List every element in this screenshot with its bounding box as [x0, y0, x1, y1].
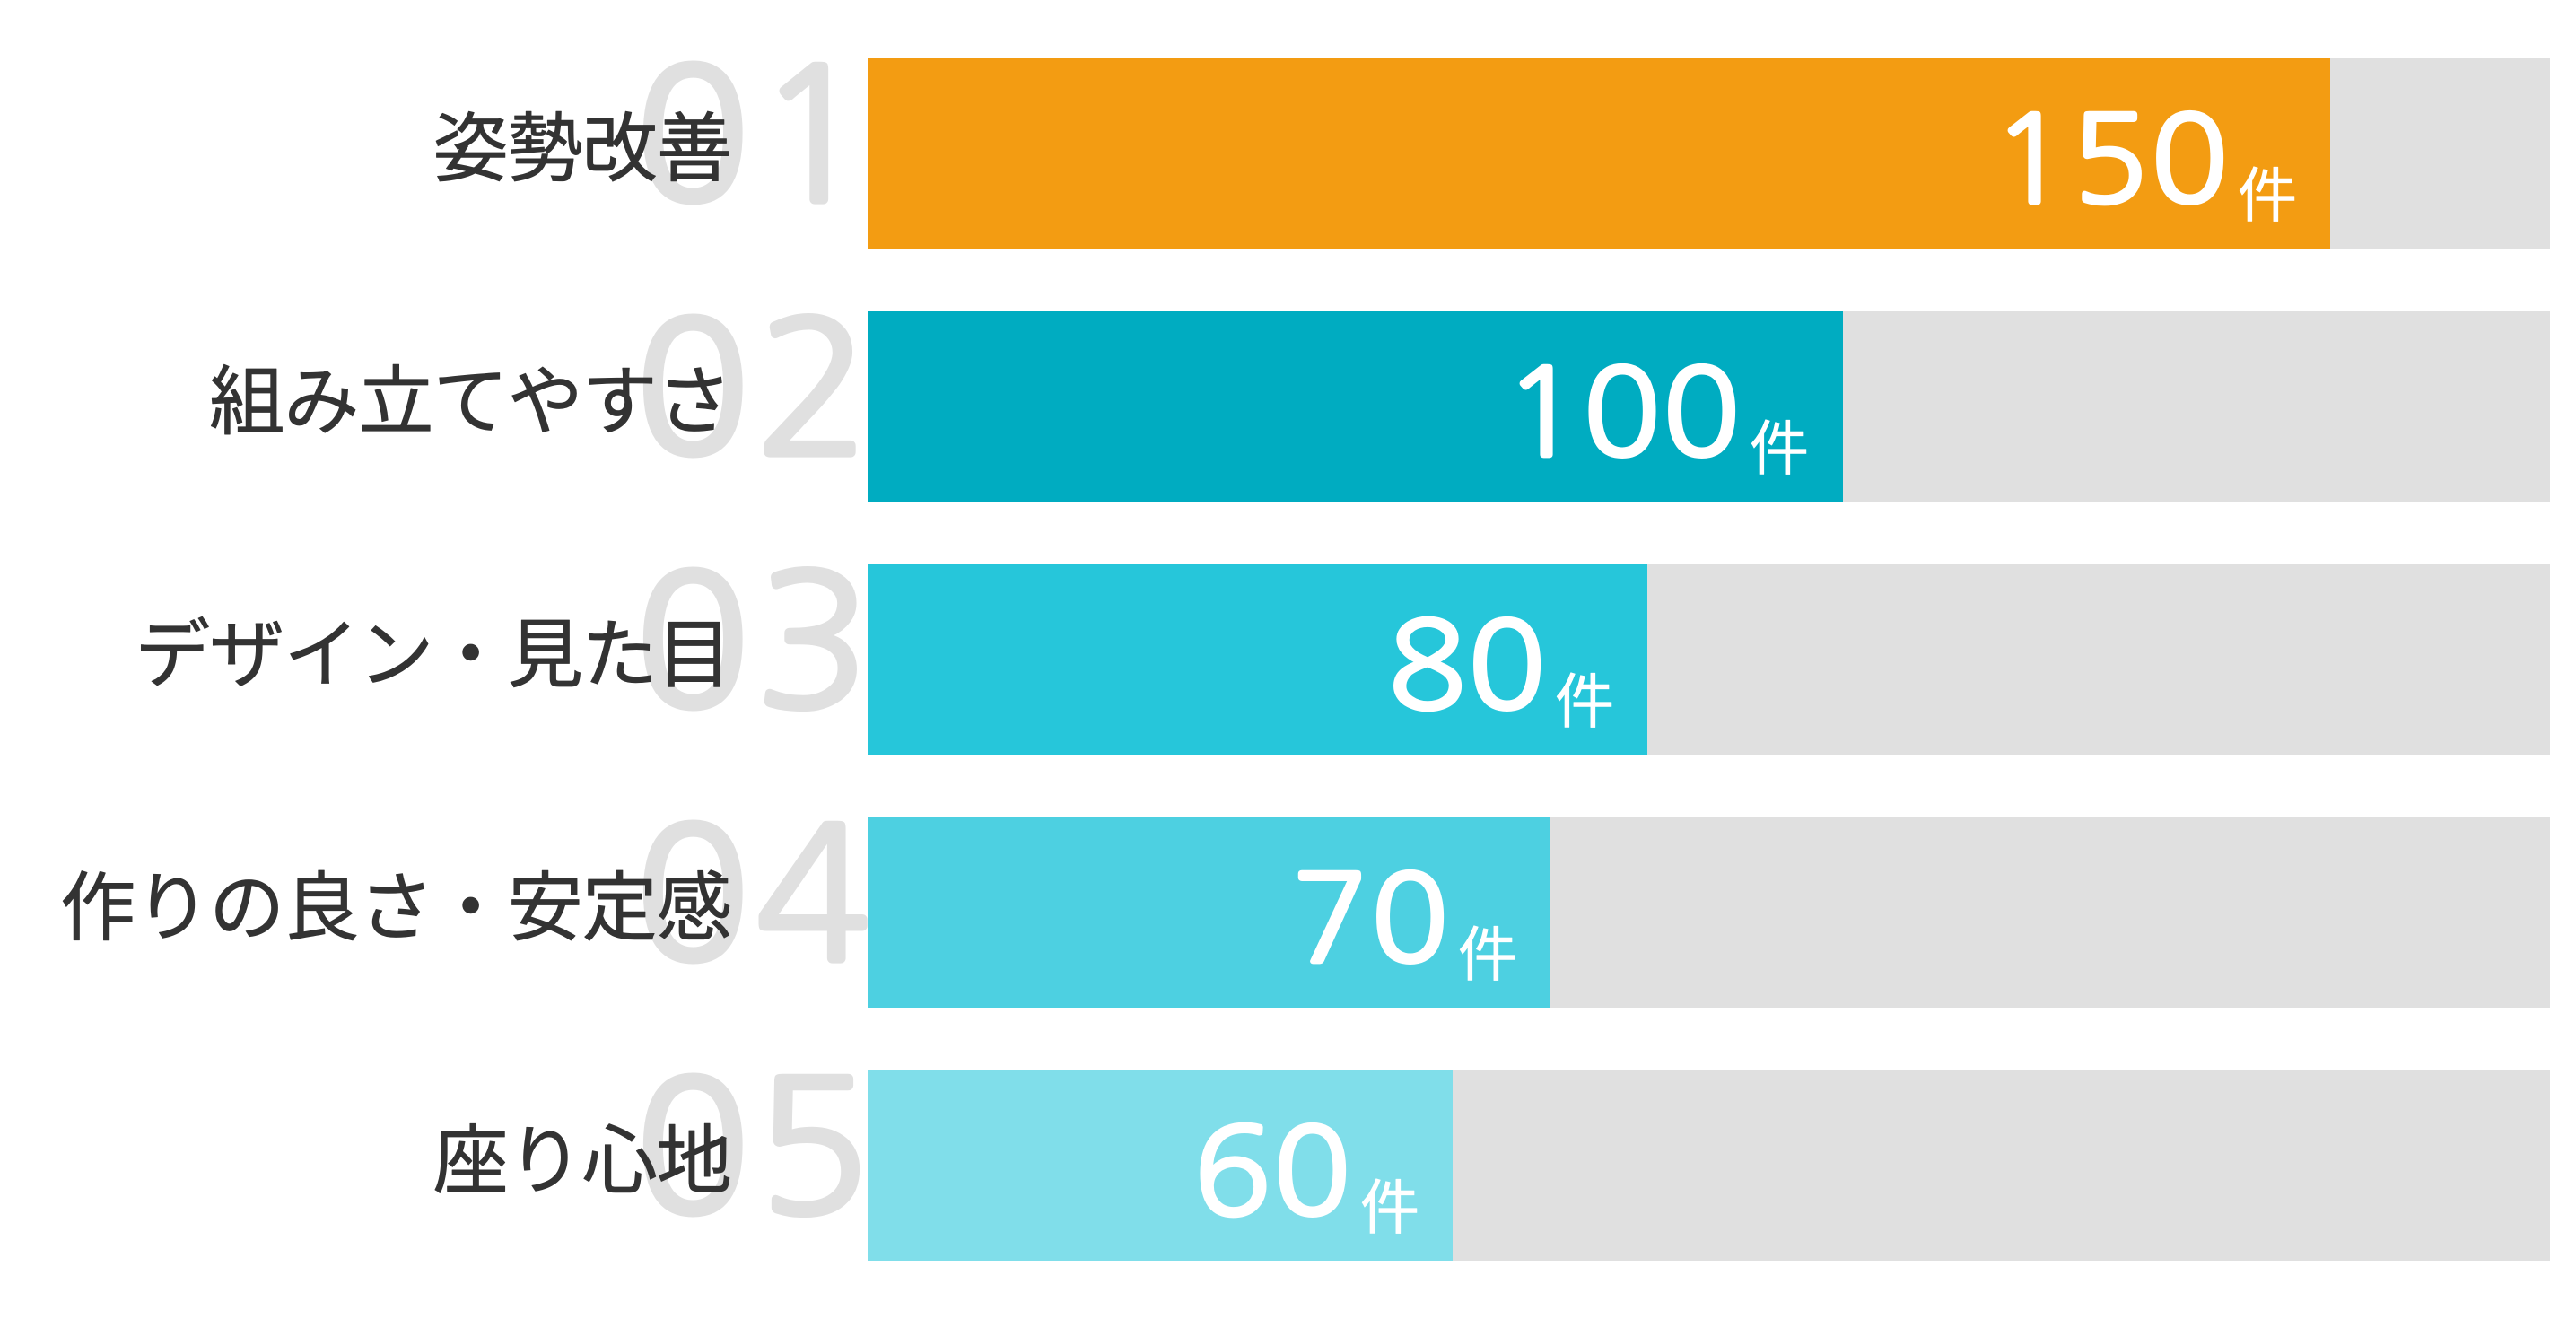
value: 150: [1991, 100, 2230, 221]
bar track: [868, 817, 2550, 1008]
category label: 姿勢改善: [433, 107, 731, 191]
rank number 04: 04: [634, 804, 876, 987]
value bar: [868, 817, 1550, 1008]
unit: 件: [1360, 1175, 1419, 1241]
value bar: [868, 1070, 1453, 1261]
unit: 件: [1458, 922, 1517, 988]
row 05: seating comfort: [433, 1057, 2550, 1261]
value: 70: [1291, 859, 1450, 980]
bar track: [868, 311, 2550, 502]
category label: 組み立てやすさ: [209, 360, 731, 444]
category label: 作りの良さ・安定感: [60, 866, 731, 950]
value: 100: [1503, 353, 1742, 474]
unit: 件: [1750, 415, 1809, 482]
rank number 02: 02: [634, 298, 876, 481]
rank number 05: 05: [634, 1057, 876, 1240]
row 01: posture improvement: [433, 45, 2550, 249]
value bar: [868, 58, 2330, 249]
category label: デザイン・見た目: [135, 613, 731, 697]
value: 60: [1193, 1112, 1352, 1233]
unit: 件: [1555, 668, 1614, 735]
bar track: [868, 58, 2550, 249]
row 03: design and appearance: [135, 551, 2550, 755]
unit: 件: [2238, 162, 2297, 229]
value bar: [868, 564, 1647, 755]
rank number 01: 01: [634, 45, 876, 228]
row 02: ease of assembly: [209, 298, 2550, 502]
category label: 座り心地: [433, 1119, 731, 1203]
bar track: [868, 564, 2550, 755]
bar track: [868, 1070, 2550, 1261]
value: 80: [1388, 606, 1547, 727]
value bar: [868, 311, 1843, 502]
rank number 03: 03: [634, 551, 876, 734]
row 04: build quality and stability: [60, 804, 2550, 1008]
